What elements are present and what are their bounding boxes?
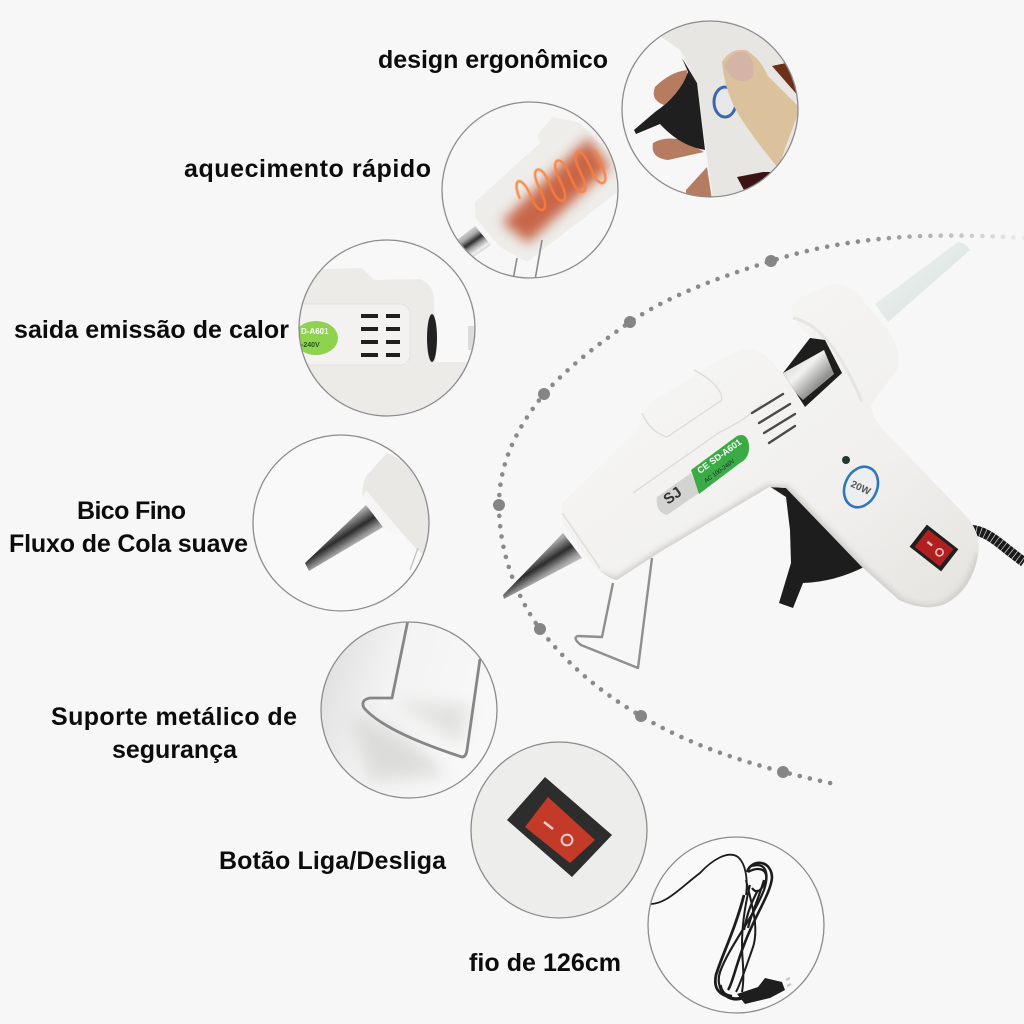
inset panel xyxy=(292,304,410,365)
glue tube window xyxy=(783,338,842,407)
gun body xyxy=(562,284,979,607)
callout circle: saida emissao de calor xyxy=(292,240,480,420)
label: suporte metalico de: Suporte metálico de xyxy=(51,703,297,731)
O mark xyxy=(562,835,572,845)
callout circle: fio de 126cm xyxy=(647,837,824,1013)
switch edge xyxy=(737,172,770,190)
nozzle xyxy=(457,226,491,257)
vents xyxy=(361,314,400,357)
gun nose xyxy=(362,453,428,554)
housing xyxy=(475,117,622,262)
switch frame xyxy=(507,777,612,877)
callout circle: botao liga/desliga xyxy=(471,742,647,918)
nozzle tip xyxy=(305,505,383,571)
callout circle: suporte metalico xyxy=(321,620,497,798)
green label xyxy=(300,321,338,355)
label: fio de 126cm: fio de 126cm xyxy=(469,949,621,977)
stand wires xyxy=(513,240,542,280)
callout circle: bico fino xyxy=(253,435,445,611)
power switch xyxy=(910,525,958,571)
ergonomic handle xyxy=(660,15,800,200)
callout circle: aquecimento rapido xyxy=(442,102,622,280)
metal wire stand xyxy=(363,620,480,757)
label: seguranca: segurança xyxy=(112,736,238,764)
product label: CE SD-A601 xyxy=(695,437,743,476)
glue gun main illustration xyxy=(503,242,1024,668)
power cord xyxy=(972,530,1024,562)
label: saida emissao de calor: saida emissão de calor xyxy=(14,316,289,344)
trigger xyxy=(634,58,705,150)
dark background corner xyxy=(772,63,796,94)
indicator LED xyxy=(842,456,850,464)
label: aquecimento rapido: aquecimento rápido xyxy=(184,155,431,183)
plug xyxy=(737,978,785,1004)
label: fluxo de cola suave: Fluxo de Cola suave xyxy=(9,530,248,558)
soft edge shading xyxy=(582,489,980,609)
wire xyxy=(410,548,418,570)
heat glow xyxy=(502,138,610,243)
product label: AC 100-240V xyxy=(704,459,736,485)
heating coil xyxy=(514,149,608,212)
soft shading xyxy=(350,715,445,780)
product label xyxy=(657,435,749,515)
label: design ergonomico: design ergonômico xyxy=(378,46,608,74)
callout circle: saida emissao de calor: D-A601 xyxy=(301,327,329,336)
coiled cable xyxy=(647,855,772,999)
dark window edge xyxy=(427,314,437,362)
red rocker xyxy=(525,797,595,863)
wattage badge: 20W xyxy=(849,479,873,498)
body highlights and seams xyxy=(562,370,762,568)
metal stand xyxy=(576,558,652,668)
fingers xyxy=(654,70,688,105)
label: botao liga/desliga: Botão Liga/Desliga xyxy=(219,847,447,875)
wattage badge xyxy=(838,461,884,513)
dotted arc around the glue gun xyxy=(493,236,1024,784)
product label: SJ xyxy=(660,484,685,508)
badge xyxy=(714,87,736,117)
I mark xyxy=(544,822,553,829)
label: bico fino: Bico Fino xyxy=(77,497,186,525)
glue stick xyxy=(875,242,970,322)
vents xyxy=(752,394,795,443)
callout circle: saida emissao de calor: -240V xyxy=(301,342,320,349)
nozzle xyxy=(503,533,582,599)
trigger xyxy=(769,486,866,608)
housing xyxy=(304,268,468,416)
thumb xyxy=(722,50,800,168)
callout circle: design ergonomico xyxy=(622,15,800,200)
